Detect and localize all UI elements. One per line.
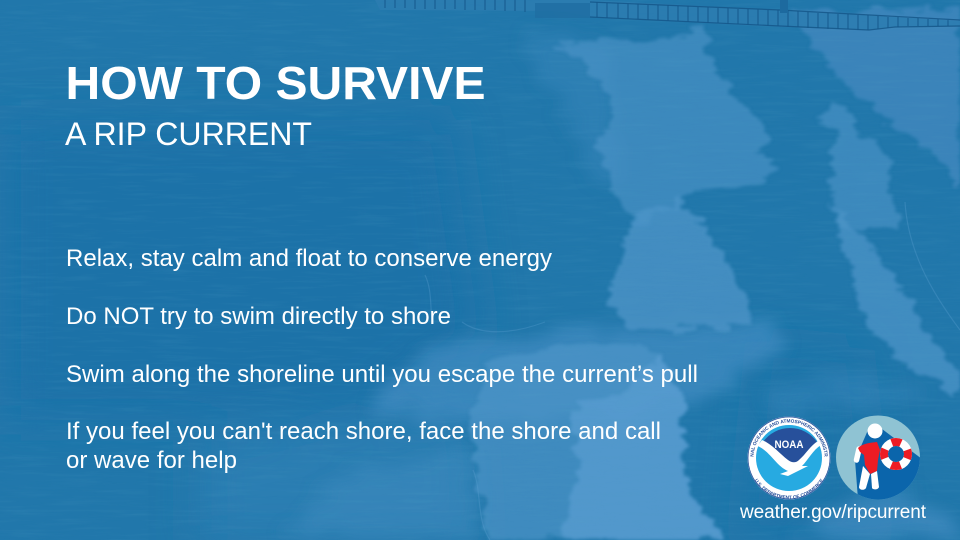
icon: rip current swimmer with life ring bbox=[836, 416, 920, 500]
ring lettering: U.S. DEPARTMENT OF COMMERCE bbox=[755, 478, 823, 499]
outer patch foam bbox=[819, 101, 901, 226]
dark blue sky bbox=[763, 428, 817, 463]
lower foam band bbox=[470, 345, 722, 540]
dry sand, top right bbox=[790, 10, 960, 190]
broad soft foam haze bbox=[285, 40, 960, 540]
life ring bbox=[884, 442, 908, 466]
upper foam band bbox=[555, 27, 777, 225]
arm bbox=[856, 449, 859, 460]
step 4: or wave for help bbox=[66, 447, 237, 474]
survival steps text bbox=[66, 245, 698, 474]
website link: weather.gov/ripcurrent bbox=[739, 502, 927, 523]
subheading: a rip current: A RIP CURRENT bbox=[65, 116, 312, 152]
outer sandbar foam bbox=[828, 200, 960, 395]
heading: how to survive: HOW TO SURVIVE bbox=[66, 57, 486, 109]
step 4: If you feel you can't reach shore, face the shore and call bbox=[66, 418, 661, 445]
step 2: Do NOT try to swim directly to shore bbox=[66, 303, 451, 330]
white wave and bird bbox=[758, 440, 821, 476]
legs bbox=[859, 466, 870, 490]
title bbox=[65, 57, 486, 152]
logo wordmark: NOAA bbox=[774, 439, 804, 451]
middle foam band bbox=[608, 200, 753, 330]
water shading bbox=[0, 120, 880, 540]
foam bands bbox=[470, 27, 960, 540]
step 4 bbox=[66, 418, 661, 474]
torso bbox=[858, 442, 880, 474]
head bbox=[868, 424, 882, 438]
step 3: Swim along the shoreline until you escape the current’s pull bbox=[66, 361, 698, 388]
pier at top of photo bbox=[375, 0, 960, 30]
thin foam lines bbox=[425, 202, 960, 540]
long shadow bbox=[855, 426, 920, 500]
ring lettering: NATIONAL OCEANIC AND ATMOSPHERIC ADMINISTRATION bbox=[750, 419, 828, 457]
step 1: Relax, stay calm and float to conserve energy bbox=[66, 245, 552, 272]
